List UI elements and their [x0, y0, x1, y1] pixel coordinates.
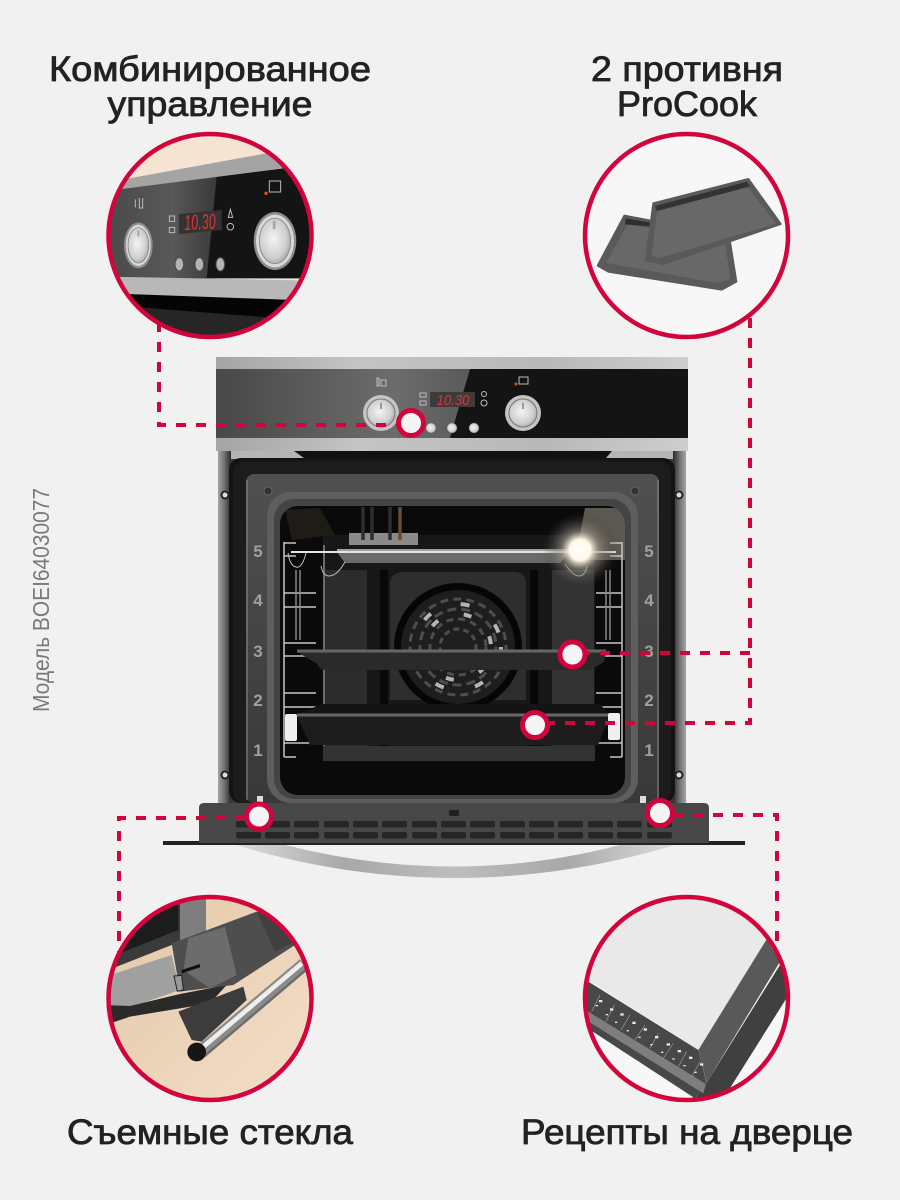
shelf level numbers left: 5 [253, 542, 263, 561]
oven cavity [280, 506, 625, 795]
callout dot: removable glass [246, 804, 272, 829]
vertical model label: Модель BOEI64030077 [28, 488, 54, 712]
front tray [646, 179, 781, 264]
heading: combined control: Комбинированное [49, 50, 371, 89]
recipe table marks [592, 995, 700, 1077]
symbols detail [135, 181, 281, 233]
shelf level numbers right: 2 [644, 691, 654, 710]
oven lamp glow [544, 516, 616, 582]
shelf level numbers left: 3 [253, 642, 263, 661]
oven illustration [163, 357, 745, 878]
oven door bar with vents [163, 796, 745, 878]
shelf level numbers right: 5 [644, 542, 654, 561]
left knob [363, 395, 399, 431]
heading: recipes on door: Рецепты на дверце [521, 1113, 853, 1152]
top wire rack [288, 550, 616, 576]
callout dot: lower tray [522, 712, 548, 738]
white rack clips [285, 713, 620, 741]
rod end cap [187, 1043, 206, 1061]
left knob detail [124, 222, 153, 268]
shelf level numbers left: 4 [253, 591, 263, 610]
ventilation slots [236, 821, 672, 838]
shelf level numbers right: 3 [644, 642, 654, 661]
fan [394, 583, 522, 711]
heading: two ProCook trays: 2 противня [591, 50, 783, 89]
shelf level numbers right: 1 [644, 741, 654, 760]
right knob detail [254, 212, 296, 270]
circle panel: recipes on door [582, 894, 790, 1102]
circle panel: control detail [106, 132, 314, 340]
heading: removable glass: Съемные стекла [67, 1113, 354, 1152]
buttons detail [175, 258, 225, 271]
panel symbols [377, 377, 528, 406]
circle panel: removable glass [106, 894, 314, 1102]
handle rod [200, 963, 307, 1057]
display detail [179, 210, 222, 235]
vertical bracket plate [178, 987, 247, 1042]
side racks [284, 542, 622, 757]
lower tray [295, 704, 610, 745]
circle panel: two trays [585, 134, 788, 337]
callout dot: control panel [398, 410, 424, 436]
callout dot: door recipes [648, 800, 672, 826]
upper tray [297, 651, 606, 670]
heading: combined control [49, 50, 371, 124]
heading: combined control: управление [108, 85, 312, 124]
recipe icons [596, 1000, 703, 1073]
heading: two ProCook trays: ProCook [617, 85, 758, 124]
shelf level numbers left [253, 542, 263, 760]
control panel [216, 357, 688, 458]
shelf level numbers right: 4 [644, 591, 654, 610]
dashed leader lines [119, 318, 777, 952]
touch buttons [426, 423, 479, 433]
heading: two ProCook trays [591, 50, 783, 124]
callout dot: upper tray [560, 642, 585, 667]
shelf level numbers right [644, 542, 654, 760]
back tray [598, 216, 736, 290]
right knob [505, 395, 541, 431]
shelf level numbers left: 2 [253, 691, 263, 710]
door bracket [172, 912, 295, 992]
oven body [218, 451, 686, 803]
shelf level numbers left: 1 [253, 741, 263, 760]
timer display: 10.30 [436, 392, 470, 409]
display detail: 10.30 [184, 210, 216, 235]
door handle [236, 845, 675, 878]
